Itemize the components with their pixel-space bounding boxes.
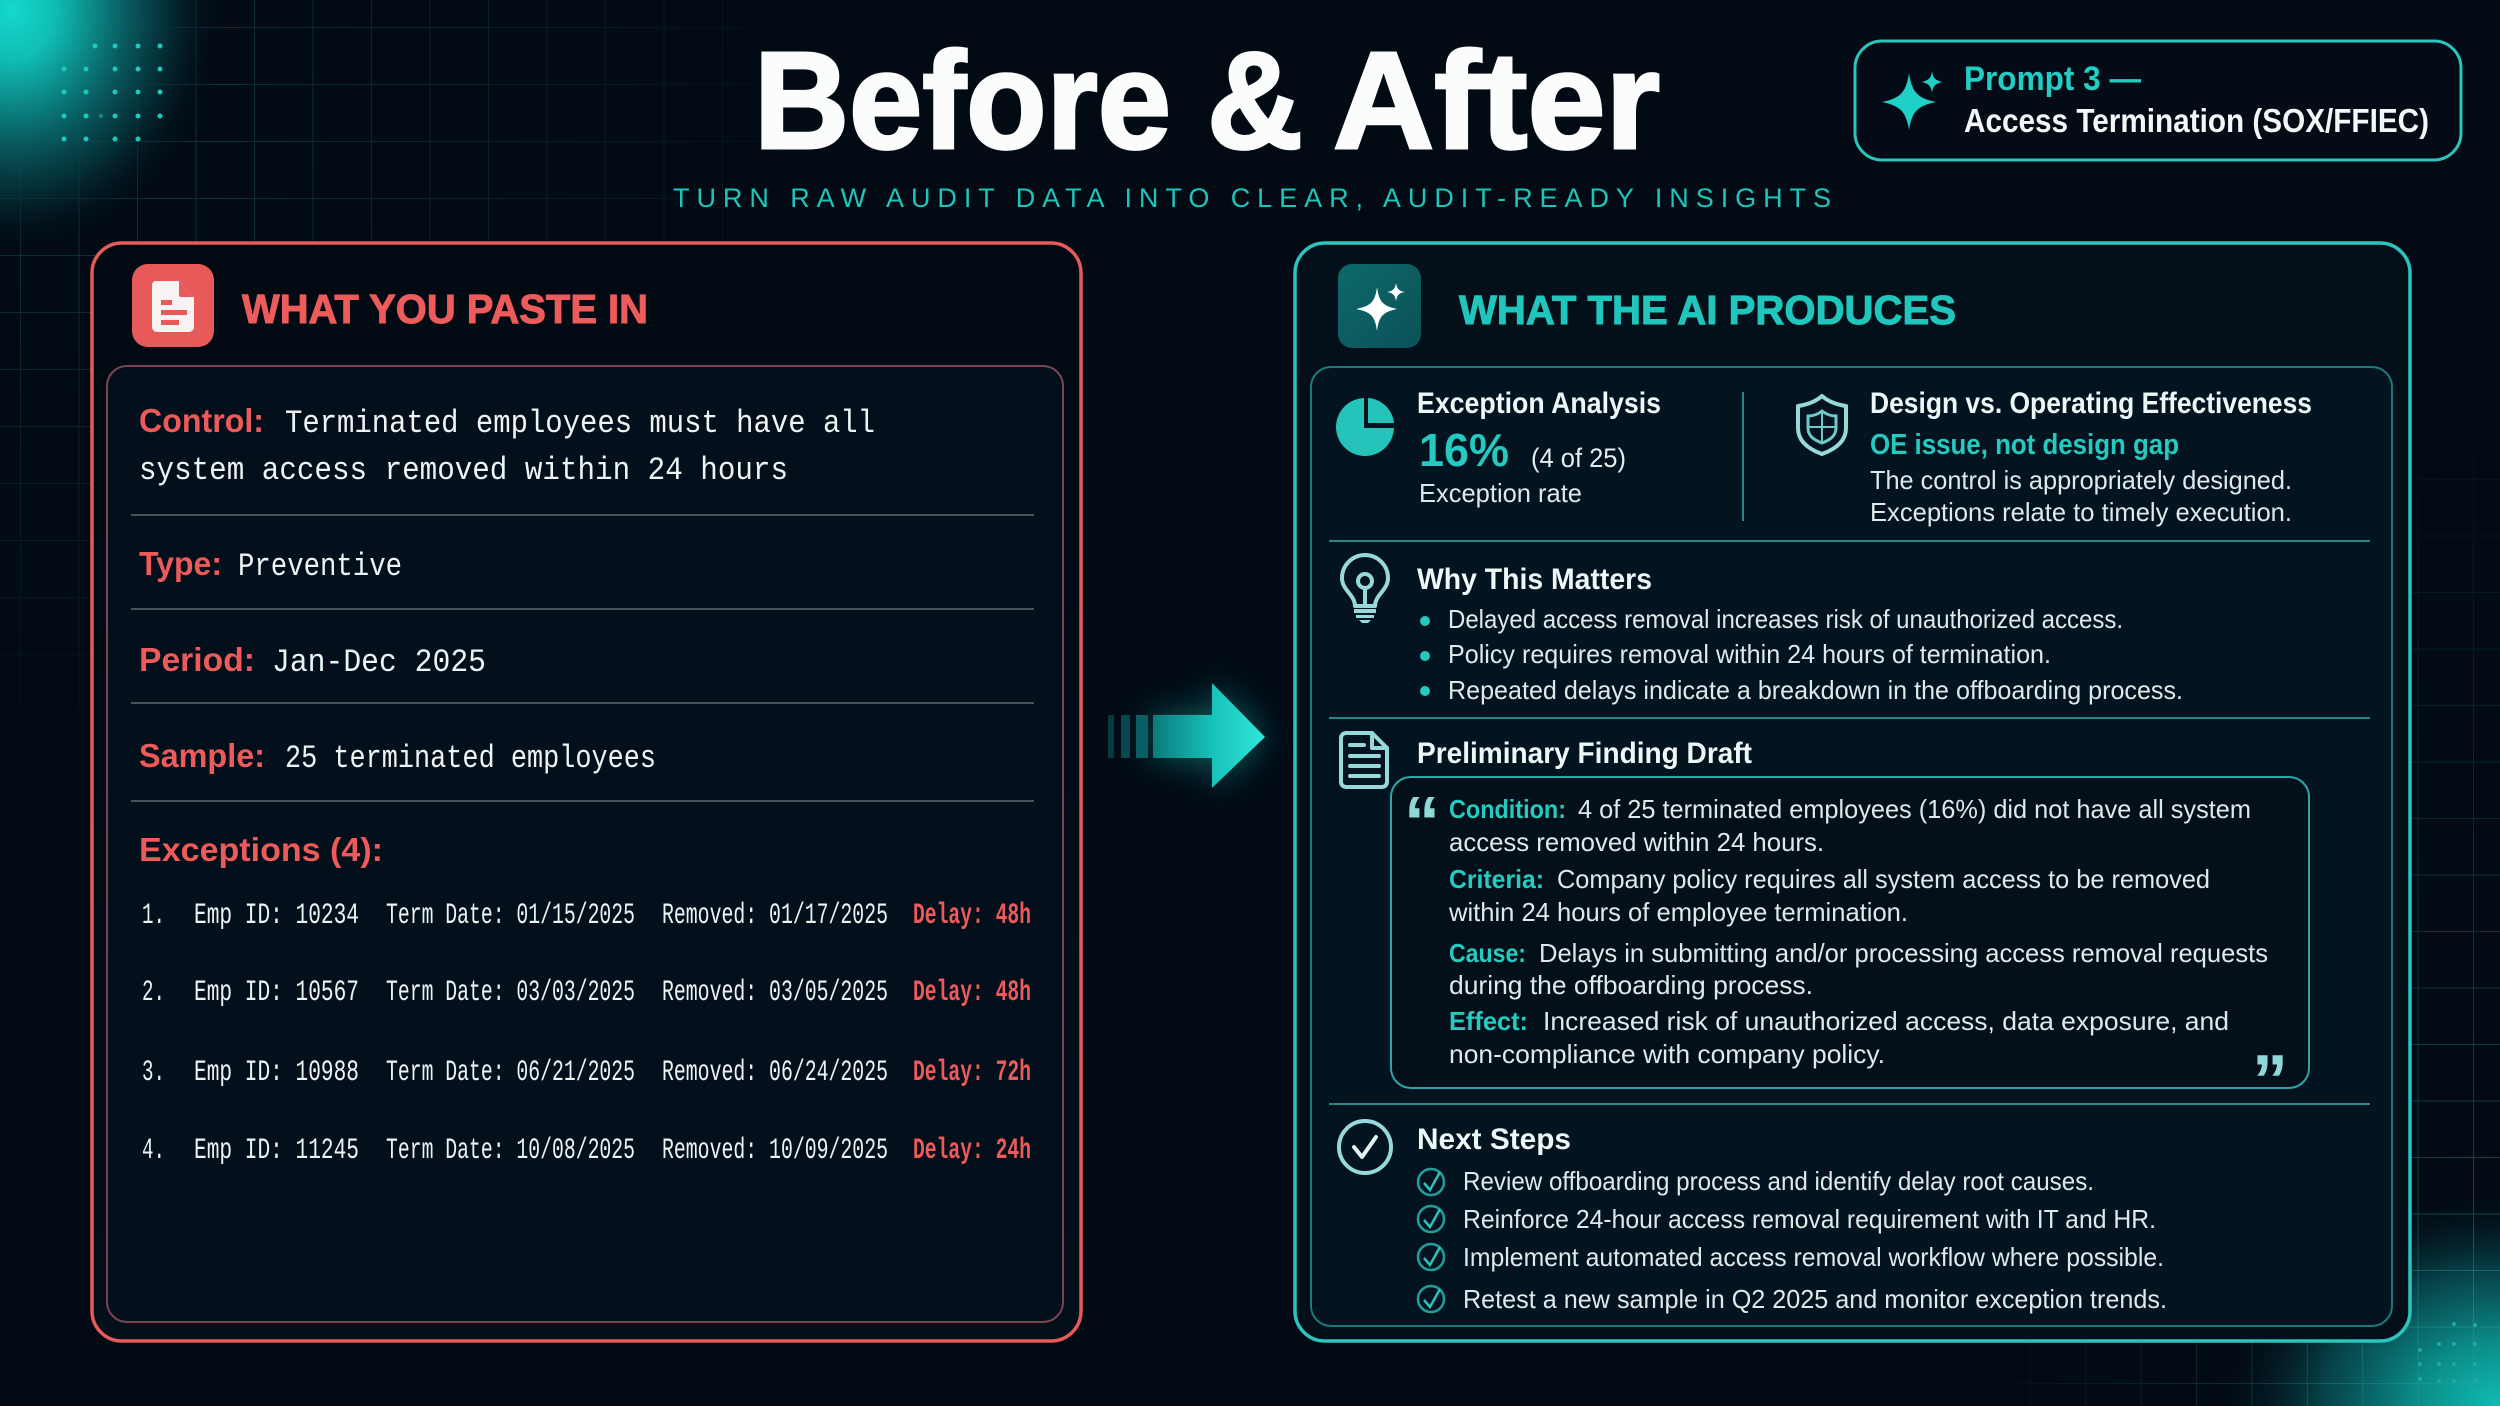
- badge: prompt 3: [1855, 41, 2461, 160]
- icon: AI sparkle: [1338, 264, 1421, 348]
- stat: exception rate: [1419, 424, 1626, 508]
- arrow: [1108, 683, 1265, 788]
- panel heading: WHAT THE AI PRODUCES: [1459, 287, 1956, 333]
- verdict: OE issue: OE issue, not design gap: [1870, 429, 2179, 461]
- effect: Increased risk of unauthorized access, data exposure, and: [1543, 1006, 2229, 1036]
- stat: exception rate: Exception rate: [1419, 478, 1582, 508]
- field: period: [139, 641, 486, 681]
- heading: exception analysis: Exception Analysis: [1417, 387, 1661, 420]
- field: type: Preventive: [238, 548, 402, 585]
- icon: sparkle: [1882, 71, 1942, 130]
- exception row 2: Term Date: 03/03/2025: [386, 976, 635, 1010]
- step 2: Reinforce 24-hour access removal requirement with IT and HR.: [1463, 1204, 2156, 1234]
- effect: non-compliance with company policy.: [1449, 1039, 1885, 1069]
- icon: closing quote: ”: [2252, 1041, 2288, 1121]
- exception row 1: [142, 899, 1031, 933]
- bullet 2: Policy requires removal within 24 hours of termination.: [1448, 639, 2051, 669]
- exception row 1: Emp ID: 10234: [194, 899, 359, 933]
- icon: document: [132, 264, 214, 347]
- title: [754, 24, 1660, 178]
- field: period: Jan-Dec 2025: [272, 644, 486, 681]
- heading: design vs operating: Design vs. Operating Effectiveness: [1870, 387, 2312, 420]
- field: sample: [139, 737, 656, 777]
- field: control: [139, 402, 875, 489]
- exception row 1: Delay: 48h: [913, 899, 1031, 933]
- stat: exception rate: (4 of 25): [1531, 443, 1626, 473]
- exception row 2: [142, 976, 1031, 1010]
- icon: lightbulb: [1342, 555, 1388, 623]
- effect: Effect:: [1449, 1006, 1528, 1036]
- icon: check circle: [1339, 1121, 1391, 1173]
- step 1: Review offboarding process and identify delay root causes.: [1463, 1166, 2094, 1196]
- icon: shield: [1798, 396, 1846, 454]
- exception row 1: Removed: 01/17/2025: [662, 899, 888, 933]
- exception row 2: 2.: [142, 976, 165, 1010]
- finding quote box: [1391, 777, 2309, 1121]
- condition: 4 of 25 terminated employees (16%) did not have all system: [1578, 794, 2251, 824]
- effect: [1449, 1006, 2229, 1069]
- exception row 1: 1.: [142, 899, 165, 933]
- field: type: [139, 545, 402, 585]
- criteria: Criteria:: [1449, 864, 1544, 894]
- heading: next steps: Next Steps: [1417, 1123, 1571, 1156]
- section: next steps: [1339, 1121, 2167, 1314]
- field: control: Control:: [139, 402, 264, 439]
- exception row 3: Removed: 06/24/2025: [662, 1056, 888, 1090]
- explanation: The control is appropriately designed.: [1870, 465, 2292, 495]
- explanation: Exceptions relate to timely execution.: [1870, 497, 2292, 527]
- title: &: [1207, 24, 1303, 178]
- cause: [1449, 938, 2268, 1000]
- cause: Delays in submitting and/or processing access removal requests: [1539, 938, 2268, 968]
- icon: pie chart: [1336, 398, 1394, 456]
- heading: why this matters: Why This Matters: [1417, 563, 1652, 596]
- title: Before: [754, 24, 1171, 178]
- exception row 4: [142, 1134, 1031, 1168]
- heading: preliminary finding: Preliminary Finding Draft: [1417, 737, 1752, 770]
- exception row 3: [142, 1056, 1031, 1090]
- exception row 4: Removed: 10/09/2025: [662, 1134, 888, 1168]
- step 3: Implement automated access removal workflow where possible.: [1463, 1242, 2164, 1272]
- condition: access removed within 24 hours.: [1449, 827, 1824, 857]
- exception row 2: Emp ID: 10567: [194, 976, 359, 1010]
- criteria: [1448, 864, 2210, 927]
- exception row 3: Term Date: 06/21/2025: [386, 1056, 635, 1090]
- decorative dots: bottom right: [2418, 1322, 2477, 1383]
- explanation: [1870, 465, 2292, 527]
- bullet 1: Delayed access removal increases risk of unauthorized access.: [1448, 604, 2123, 634]
- panel heading: WHAT YOU PASTE IN: [242, 286, 648, 332]
- exceptions heading: Exceptions (4):: [139, 831, 383, 868]
- badge label: prompt number: Prompt 3 —: [1964, 60, 2141, 98]
- exception row 3: Emp ID: 10988: [194, 1056, 359, 1090]
- icon: opening quote: “: [1404, 783, 1440, 863]
- exception row 4: Term Date: 10/08/2025: [386, 1134, 635, 1168]
- exception row 3: Delay: 72h: [913, 1056, 1031, 1090]
- criteria: Company policy requires all system access to be removed: [1557, 864, 2210, 894]
- section: preliminary finding draft: [1341, 733, 2309, 1121]
- condition: Condition:: [1449, 794, 1566, 824]
- title: After: [1333, 24, 1660, 178]
- exception row 3: 3.: [142, 1056, 165, 1090]
- decorative dots: top left: [62, 44, 162, 142]
- cause: Cause:: [1449, 938, 1526, 968]
- exception row 1: Term Date: 01/15/2025: [386, 899, 635, 933]
- field: sample: Sample:: [139, 737, 265, 774]
- exception row 4: Delay: 24h: [913, 1134, 1031, 1168]
- exception row 2: Delay: 48h: [913, 976, 1031, 1010]
- condition: [1449, 794, 2251, 857]
- cause: during the offboarding process.: [1449, 970, 1813, 1000]
- icon: document lines: [1341, 733, 1387, 787]
- field: control: Terminated employees must have all: [285, 405, 875, 442]
- field: sample: 25 terminated employees: [285, 740, 656, 777]
- panel: what the AI produces: [1295, 243, 2410, 1341]
- step 4: Retest a new sample in Q2 2025 and monitor exception trends.: [1463, 1284, 2167, 1314]
- subtitle: TURN RAW AUDIT DATA INTO CLEAR, AUDIT-READY INSIGHTS: [673, 183, 1831, 213]
- bullet 3: Repeated delays indicate a breakdown in the offboarding process.: [1448, 675, 2183, 705]
- badge label: topic: Access Termination (SOX/FFIEC): [1964, 102, 2429, 139]
- exception row 4: Emp ID: 11245: [194, 1134, 359, 1168]
- exception row 2: Removed: 03/05/2025: [662, 976, 888, 1010]
- field: type: Type:: [139, 545, 222, 582]
- stat: exception rate: 16%: [1419, 424, 1509, 476]
- exception row 4: 4.: [142, 1134, 165, 1168]
- panel: what you paste in: [92, 243, 1081, 1341]
- section: exception analysis: [1336, 387, 1661, 508]
- field: period: Period:: [139, 641, 255, 678]
- field: control: system access removed within 24 hours: [139, 452, 788, 489]
- section: design vs operating effectiveness: [1798, 387, 2312, 527]
- section: why this matters: [1342, 555, 2183, 705]
- criteria: within 24 hours of employee termination.: [1448, 897, 1908, 927]
